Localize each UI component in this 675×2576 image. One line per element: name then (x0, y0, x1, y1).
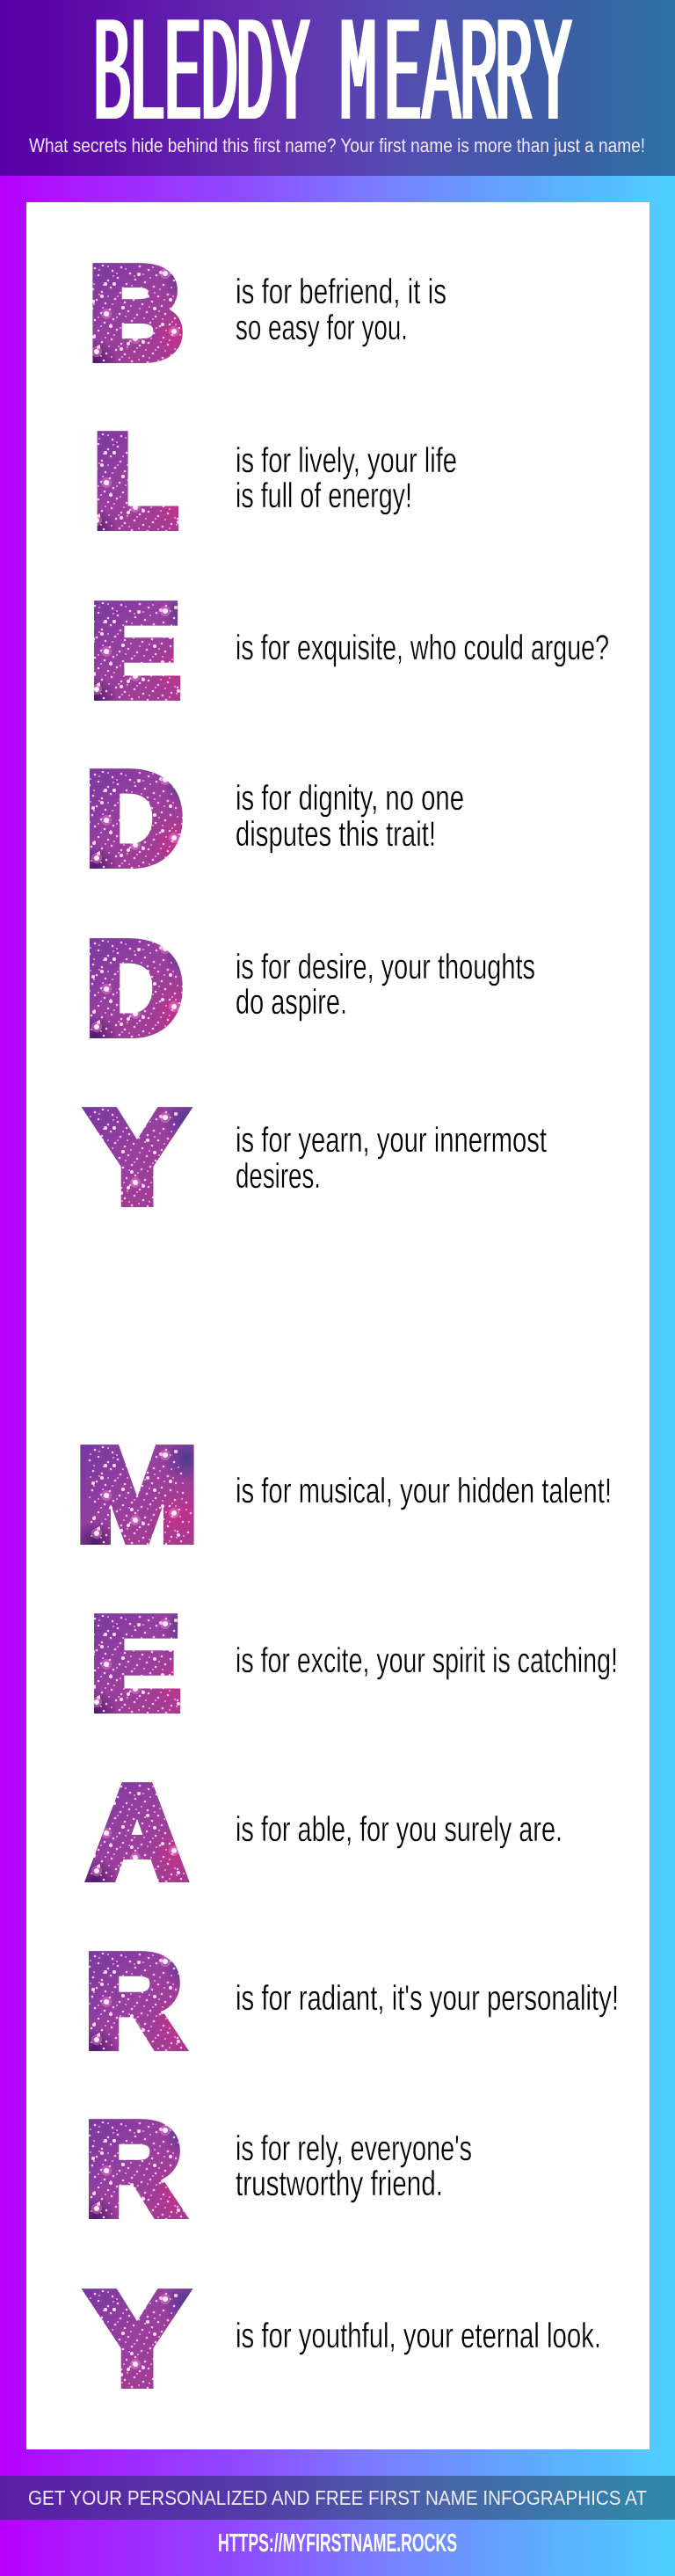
text: lively: is for lively, your life (236, 441, 457, 480)
text: lively: is full of energy! (236, 477, 412, 515)
row: E (91, 1591, 618, 1736)
letter Y: Y (90, 2267, 185, 2412)
row: L (93, 409, 457, 554)
row: D (86, 746, 464, 891)
text: befriend (236, 273, 446, 347)
text: dignity (236, 779, 464, 854)
letter R: R (85, 2097, 182, 2242)
row: M (76, 1423, 612, 1568)
letter Y: Y (90, 1085, 185, 1230)
text: rely (236, 2129, 472, 2203)
letter M: M (76, 1423, 198, 1568)
row: E (91, 579, 609, 724)
text: yearn: desires. (236, 1157, 321, 1196)
row: A (89, 1760, 562, 1905)
text: dignity: is for dignity, no one (236, 779, 464, 818)
text: befriend: is for befriend, it is (236, 273, 446, 311)
row: D (86, 916, 535, 1061)
text: yearn (236, 1121, 547, 1196)
text: dignity: disputes this trait! (236, 815, 436, 854)
text: befriend: so easy for you. (236, 309, 408, 347)
text: desire (236, 948, 535, 1022)
letter E: E (91, 1591, 180, 1736)
row: Y (90, 1085, 547, 1230)
letter A: A (89, 1760, 185, 1905)
footer url: HTTPS://MYFIRSTNAME.ROCKS (218, 2529, 457, 2558)
text: rely: trustworthy friend. (236, 2165, 443, 2203)
text: rely: is for rely, everyone's (236, 2129, 472, 2168)
header band (0, 0, 675, 176)
footer call-to-action band (0, 2476, 675, 2520)
text: lively (236, 441, 457, 515)
text: desire: is for desire, your thoughts (236, 948, 535, 986)
letter E: E (91, 579, 180, 724)
row: B (90, 241, 446, 386)
text: desire: do aspire. (236, 983, 347, 1022)
letter D: D (86, 746, 183, 891)
letter D: D (86, 916, 183, 1061)
row: Y (90, 2267, 601, 2412)
row: R (85, 1929, 619, 2074)
text: yearn: is for yearn, your innermost (236, 1121, 547, 1160)
letter R: R (85, 1929, 182, 2074)
row: R (85, 2097, 472, 2242)
letter B: B (90, 241, 183, 386)
letter L: L (93, 409, 178, 554)
